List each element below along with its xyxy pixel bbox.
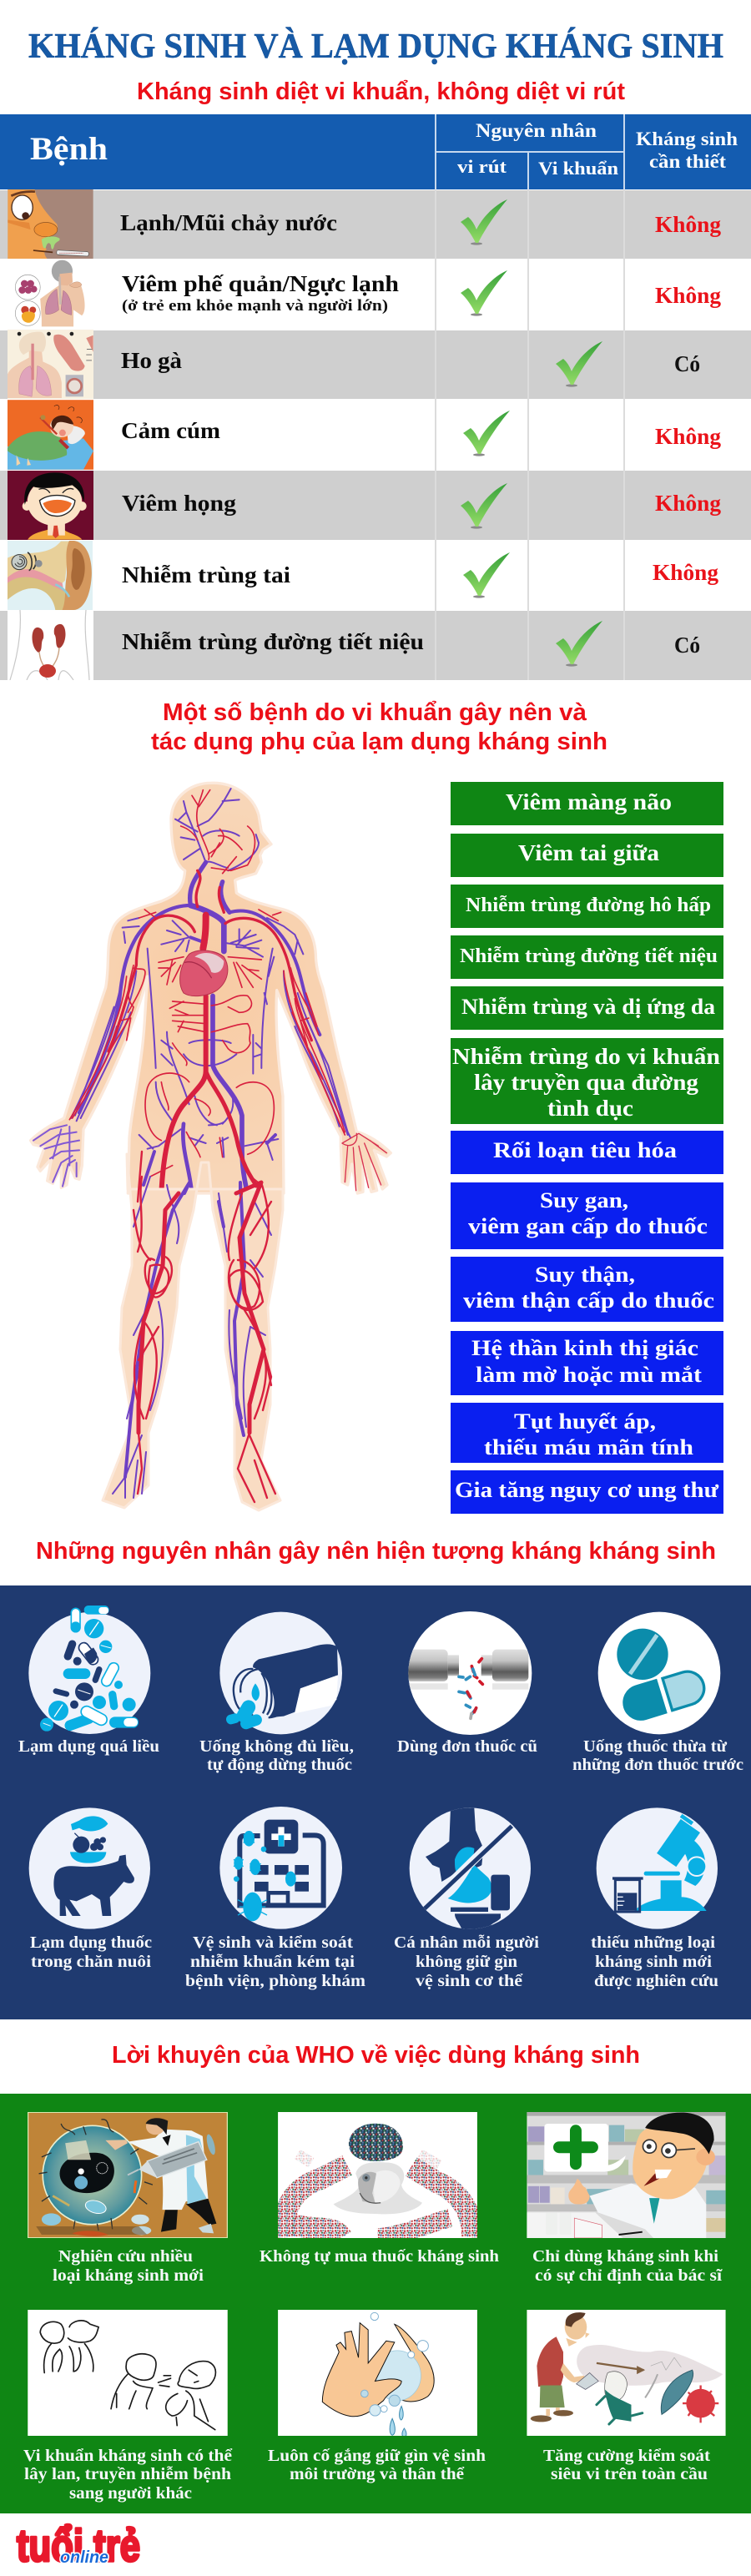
labels: WHO advice: có sự chỉ định của bác sĩ — [535, 2266, 723, 2285]
labels: causes: những đơn thuốc trước — [572, 1756, 743, 1774]
labels: causes: vệ sinh cơ thể — [416, 1972, 523, 1990]
box: vision: Hệ thần kinh thị giác — [471, 1336, 698, 1360]
list: side effects (blue boxes) — [451, 1131, 723, 1514]
box: digestive: Rối loạn tiêu hóa — [493, 1138, 677, 1162]
box: respiratory — [451, 885, 723, 928]
box: digestive — [451, 1131, 723, 1174]
labels: WHO advice: Nghiên cứu nhiều — [58, 2247, 193, 2266]
box: blood pressure: Tụt huyết áp, — [514, 1409, 656, 1434]
icon: ear infection — [8, 541, 93, 610]
row backgrounds — [0, 189, 751, 680]
antibiotic needed column: Có — [674, 351, 700, 376]
labels: causes: nhiễm khuẩn kém tại — [190, 1953, 355, 1971]
labels: WHO advice: sang người khác — [69, 2484, 192, 2503]
labels: WHO advice: Vi khuẩn kháng sinh có thể — [23, 2447, 233, 2465]
icon: no personal hygiene — [410, 1807, 531, 1929]
logo: Tuoi Tre Online: online — [60, 2548, 108, 2567]
antibiotic needed column: Không — [655, 212, 721, 237]
box: kidney: Suy thận, — [535, 1263, 635, 1287]
row text: bronchitis: Viêm phế quản/Ngực lạnh — [122, 271, 399, 296]
row text: flu: Cảm cúm — [121, 418, 221, 443]
box: liver: Suy gan, — [540, 1188, 628, 1212]
labels: WHO advice: Không tự mua thuốc kháng sinh — [260, 2247, 499, 2266]
table header: Kháng sinh — [636, 129, 738, 149]
labels: causes — [18, 1737, 743, 1990]
icon: runny nose — [8, 189, 93, 259]
illustration: human circulatory system — [31, 783, 391, 1510]
box: sexually transmitted: tình dục — [547, 1096, 633, 1121]
labels: causes: Lạm dụng quá liều — [18, 1737, 159, 1756]
box: meningitis: Viêm màng não — [506, 789, 672, 814]
labels: WHO advice: loại kháng sinh mới — [53, 2266, 204, 2285]
box: blood pressure — [451, 1403, 723, 1463]
labels: causes: Dùng đơn thuốc cũ — [397, 1737, 537, 1756]
labels: WHO advice: Chỉ dùng kháng sinh khi — [532, 2247, 718, 2266]
row text: whooping cough: Ho gà — [121, 348, 183, 373]
icon: flu — [8, 400, 93, 470]
labels: causes: không giữ gìn — [416, 1953, 517, 1971]
antibiotic needed column — [653, 212, 721, 658]
labels: causes: được nghiên cứu — [594, 1972, 718, 1990]
panel: causes — [0, 1585, 751, 2019]
icon: whooping cough — [8, 330, 93, 399]
heading: causes of resistance: Những nguyên nhân gây nên hiện tượng kháng kháng sinh — [36, 1538, 716, 1565]
list: bacterial diseases (green boxes) — [451, 782, 723, 1124]
row text: bronchitis: (ở trẻ em khỏe mạnh và người lớn) — [122, 297, 388, 315]
labels: WHO advice — [23, 2247, 723, 2503]
table header: vi rút — [457, 156, 507, 177]
labels: WHO advice: siêu vi trên toàn cầu — [551, 2465, 708, 2483]
labels: WHO advice: Tăng cường kiểm soát — [543, 2447, 710, 2465]
antibiotic needed column: Không — [655, 491, 721, 516]
labels: causes: tự động dừng thuốc — [207, 1756, 352, 1774]
icon: overdose pills — [28, 1606, 150, 1734]
labels: causes: kháng sinh mới — [595, 1953, 712, 1971]
box: liver — [451, 1182, 723, 1249]
icon: old prescription — [406, 1611, 532, 1735]
image: washing hands — [278, 2310, 477, 2436]
heading: bacteria diseases and side effects: tác dụng phụ của lạm dụng kháng sinh — [151, 728, 607, 755]
icon: leftover pills — [598, 1612, 720, 1734]
heading: WHO advice: Lời khuyên của WHO về việc dùng kháng sinh — [112, 2042, 640, 2069]
box: sexually transmitted: Nhiễm trùng do vi khuẩn — [452, 1044, 720, 1069]
table header: Bệnh — [30, 131, 108, 167]
icon: bronchitis — [15, 260, 85, 327]
box: kidney — [451, 1257, 723, 1322]
row text: urinary tract infection: Nhiễm trùng đường tiết niệu — [122, 629, 424, 654]
panel: disease table — [0, 114, 751, 680]
box: cancer: Gia tăng nguy cơ ung thư — [455, 1478, 718, 1502]
labels: causes: bệnh viện, phòng khám — [185, 1972, 365, 1990]
labels: causes: Uống không đủ liều, — [199, 1737, 354, 1756]
image: people spreading infection sketch — [28, 2310, 228, 2436]
icon: cow with food — [29, 1807, 150, 1929]
box: respiratory: Nhiễm trùng đường hô hấp — [466, 895, 711, 916]
box: vision — [451, 1331, 723, 1395]
logo: Tuoi Tre Online: tuổi trẻ — [17, 2521, 140, 2571]
antibiotic needed column: Không — [653, 560, 718, 585]
table header: Nguyên nhân — [476, 120, 597, 141]
labels: causes: trong chăn nuôi — [31, 1953, 151, 1971]
box: kidney: viêm thận cấp do thuốc — [463, 1288, 714, 1313]
labels: causes: Lạm dụng thuốc — [30, 1933, 152, 1952]
row text: ear infection: Nhiễm trùng tai — [122, 562, 291, 587]
box: middle ear — [451, 834, 723, 877]
panel: WHO advice — [0, 2094, 751, 2513]
box: cancer — [451, 1470, 723, 1514]
body upper — [31, 783, 391, 1193]
box: middle ear: Viêm tai giữa — [518, 840, 660, 865]
labels: WHO advice: Luôn cố gắng giữ gìn vệ sinh — [268, 2447, 486, 2465]
icon: microscope — [597, 1807, 718, 1929]
labels: WHO advice: lây lan, truyền nhiễm bệnh — [24, 2465, 231, 2483]
box: urinary: Nhiễm trùng đường tiết niệu — [460, 945, 718, 967]
box: meningitis — [451, 782, 723, 825]
antibiotic needed column: Có — [674, 633, 700, 658]
labels: causes: Cá nhân mỗi người — [394, 1933, 539, 1952]
icon: hospital with bacteria — [219, 1807, 342, 1929]
image: head made of pills — [278, 2112, 477, 2238]
row text: cold: Lạnh/Mũi chảy nước — [120, 210, 337, 235]
row text: sore throat: Viêm họng — [122, 491, 237, 516]
box: blood pressure: thiếu máu mãn tính — [484, 1435, 694, 1459]
title: KHÁNG SINH VÀ LẠM DỤNG KHÁNG SINH — [28, 27, 723, 66]
table header: cần thiết — [649, 151, 726, 172]
check marks — [461, 199, 602, 667]
subtitle: Kháng sinh diệt vi khuẩn, không diệt vi rút — [137, 78, 625, 105]
labels: causes: Vệ sinh và kiểm soát — [193, 1933, 353, 1952]
icon: spilled pill bottle — [219, 1612, 342, 1734]
image: antibiotic fighting virus cartoon — [527, 2310, 726, 2436]
body lower — [103, 1135, 283, 1510]
table header: Vi khuẩn — [538, 158, 618, 179]
heart — [180, 950, 228, 996]
icon: sore throat — [8, 471, 93, 540]
image: pharmacist — [527, 2112, 726, 2238]
table header — [0, 114, 751, 189]
row text: bronchitis — [122, 271, 399, 315]
labels: causes: thiếu những loại — [591, 1933, 715, 1952]
box: skin: Nhiễm trùng và dị ứng da — [461, 995, 715, 1019]
heading: bacteria diseases and side effects — [151, 699, 607, 755]
box: sexually transmitted — [451, 1038, 723, 1124]
box: sexually transmitted: lây truyền qua đường — [474, 1070, 699, 1095]
heading: bacteria diseases and side effects: Một số bệnh do vi khuẩn gây nên và — [163, 699, 587, 726]
box: skin — [451, 986, 723, 1030]
labels: WHO advice: môi trường và thân thể — [290, 2465, 465, 2483]
antibiotic needed column: Không — [655, 424, 721, 449]
box: urinary — [451, 935, 723, 979]
icon: urinary tract — [8, 610, 93, 680]
image: scientist injecting bacteria — [28, 2112, 228, 2238]
antibiotic needed column: Không — [655, 283, 721, 308]
box: liver: viêm gan cấp do thuốc — [468, 1214, 708, 1238]
labels: causes: Uống thuốc thừa từ — [583, 1737, 728, 1756]
box: vision: làm mờ hoặc mù mắt — [476, 1363, 702, 1387]
